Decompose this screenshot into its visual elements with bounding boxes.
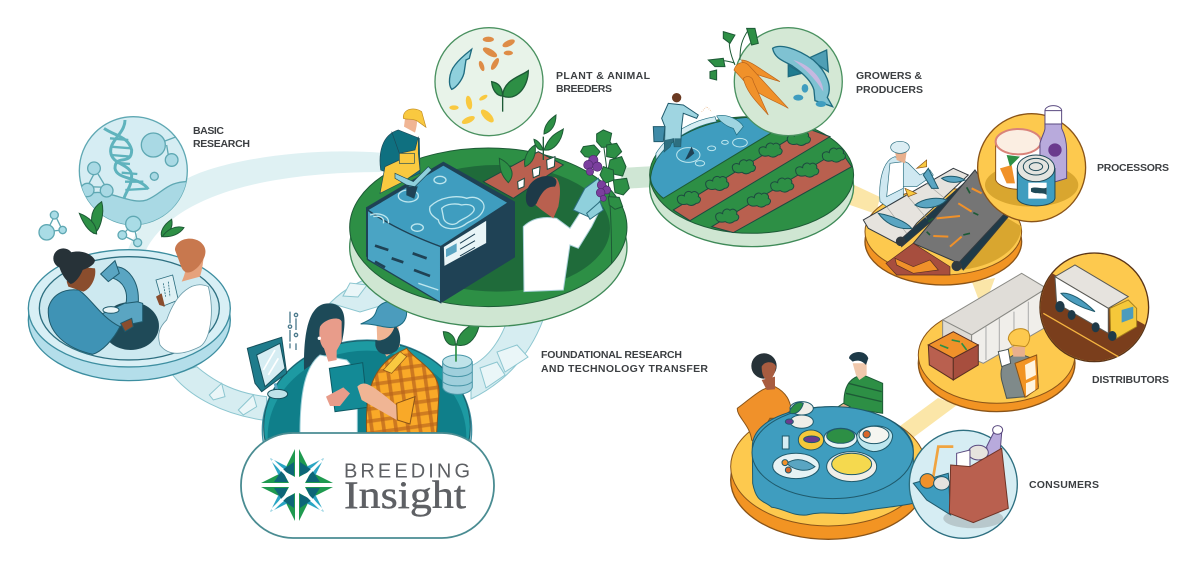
- label: foundational research and technology transfer: FOUNDATIONAL RESEARCH: [541, 349, 682, 361]
- icon: logo star: [261, 449, 333, 521]
- icon: seedling on database: [443, 321, 480, 394]
- warehouse: [943, 273, 1047, 363]
- logo wordmark: BREEDING: [344, 460, 470, 482]
- icon: carrot tops: [708, 28, 758, 80]
- figure: woman diner: [737, 353, 792, 443]
- label: growers and producers: PRODUCERS: [856, 84, 923, 96]
- teal platform: [262, 340, 472, 523]
- platform disc: [350, 148, 627, 327]
- logo wordmark: Insight: [344, 474, 466, 517]
- soil rows: [673, 128, 852, 233]
- panel: breeders icon circle: [435, 28, 543, 136]
- panel: distributors icon circle: [1040, 253, 1149, 367]
- icon: truck: [1055, 265, 1137, 341]
- figure: farmer feeding fish: [653, 93, 712, 152]
- label: plant and animal breeders: BREEDERS: [556, 83, 612, 95]
- icon: molecules: [39, 211, 142, 247]
- icon: fish: [449, 49, 472, 89]
- icon: juice bottle: [1040, 106, 1067, 182]
- figure: scientist with tablet: [300, 303, 367, 433]
- label: basic research: BASIC: [193, 125, 224, 137]
- water ripples and fish: [677, 138, 747, 166]
- panel: consumers: [731, 352, 926, 539]
- label: growers and producers: GROWERS &: [856, 70, 922, 82]
- conveyor: fish belt: [863, 168, 982, 247]
- icon: seeds: [478, 37, 516, 72]
- figure: worker in apron: [380, 109, 432, 198]
- figure: microscope: [96, 261, 143, 330]
- icon: glass jar: [996, 129, 1042, 189]
- panel: breeders platform: [350, 109, 629, 327]
- panel: Breeding Insight scene: [247, 301, 480, 523]
- icon: shopping basket: [913, 447, 953, 515]
- connector: processors to distributors: [972, 278, 995, 305]
- panel: basic research illustration: [28, 117, 230, 381]
- connector: breeders to growers: [620, 166, 656, 189]
- icon: sprout: [492, 71, 528, 112]
- label: basic research: RESEARCH: [193, 138, 250, 150]
- label: processors: PROCESSORS: [1097, 162, 1169, 174]
- crop rows: [677, 131, 845, 223]
- label: consumers: CONSUMERS: [1029, 479, 1099, 491]
- lab platform: [28, 250, 230, 381]
- panel: consumers icon circle: [909, 426, 1017, 538]
- icon: groceries in bag: [957, 426, 1003, 468]
- icon: leaves: [79, 202, 184, 237]
- crate of produce: [928, 332, 978, 380]
- panel: growers icon circle: [708, 28, 842, 136]
- processors disc: [865, 188, 1022, 285]
- conveyor: carrot belt: [913, 170, 1008, 271]
- figure: worker in hairnet: [880, 141, 933, 207]
- figure: fish tank: [366, 162, 515, 303]
- table with cloth: [752, 407, 913, 515]
- label: distributors: DISTRIBUTORS: [1092, 374, 1169, 386]
- connector: growers to processors: [850, 183, 880, 214]
- plates of food: [773, 402, 893, 482]
- figure: worker with clipboard: [998, 329, 1038, 398]
- connector: distributors to consumers: [900, 398, 957, 440]
- icon: monitor: [247, 337, 288, 399]
- figure: man diner: [833, 352, 883, 415]
- figure: scientist at microscope: [48, 248, 133, 354]
- panel: processors: [863, 141, 1022, 285]
- panel: growers disc: [650, 115, 854, 247]
- bin of carrots: [886, 243, 950, 275]
- icon: paper bag: [949, 448, 1008, 523]
- carrots on belt: [933, 188, 982, 247]
- fish on belt: [878, 168, 965, 229]
- connector: basic research to breeders: [128, 151, 384, 250]
- distributors disc: [918, 307, 1075, 412]
- icon: grape vine: [581, 130, 629, 263]
- icon: carrots: [734, 60, 788, 115]
- figure: scientist with tablet: [156, 239, 211, 353]
- panel: distributors: [918, 273, 1075, 412]
- panel: Breeding Insight logo pill: [241, 433, 494, 538]
- figure: scientist with grapes: [523, 176, 603, 292]
- figure: farmer in plaid shirt: [357, 301, 439, 433]
- arrow arc: Breeding Insight to breeders: [330, 273, 543, 399]
- consumers disc: [731, 407, 926, 539]
- icon: salmon: [773, 46, 833, 107]
- label: foundational research and technology transfer: AND TECHNOLOGY TRANSFER: [541, 363, 708, 375]
- water field: [651, 117, 773, 198]
- icon: plant beds: [483, 115, 563, 198]
- icon: fish can: [1017, 155, 1055, 206]
- arrow arc: basic research to Breeding Insight: [173, 367, 267, 421]
- icon: binary digits: [288, 312, 298, 350]
- icon: DNA circle: [78, 116, 188, 225]
- label: plant and animal breeders: PLANT & ANIMAL: [556, 70, 651, 82]
- logo wordmark: [344, 460, 470, 517]
- panel: processors icon circle: [978, 106, 1086, 222]
